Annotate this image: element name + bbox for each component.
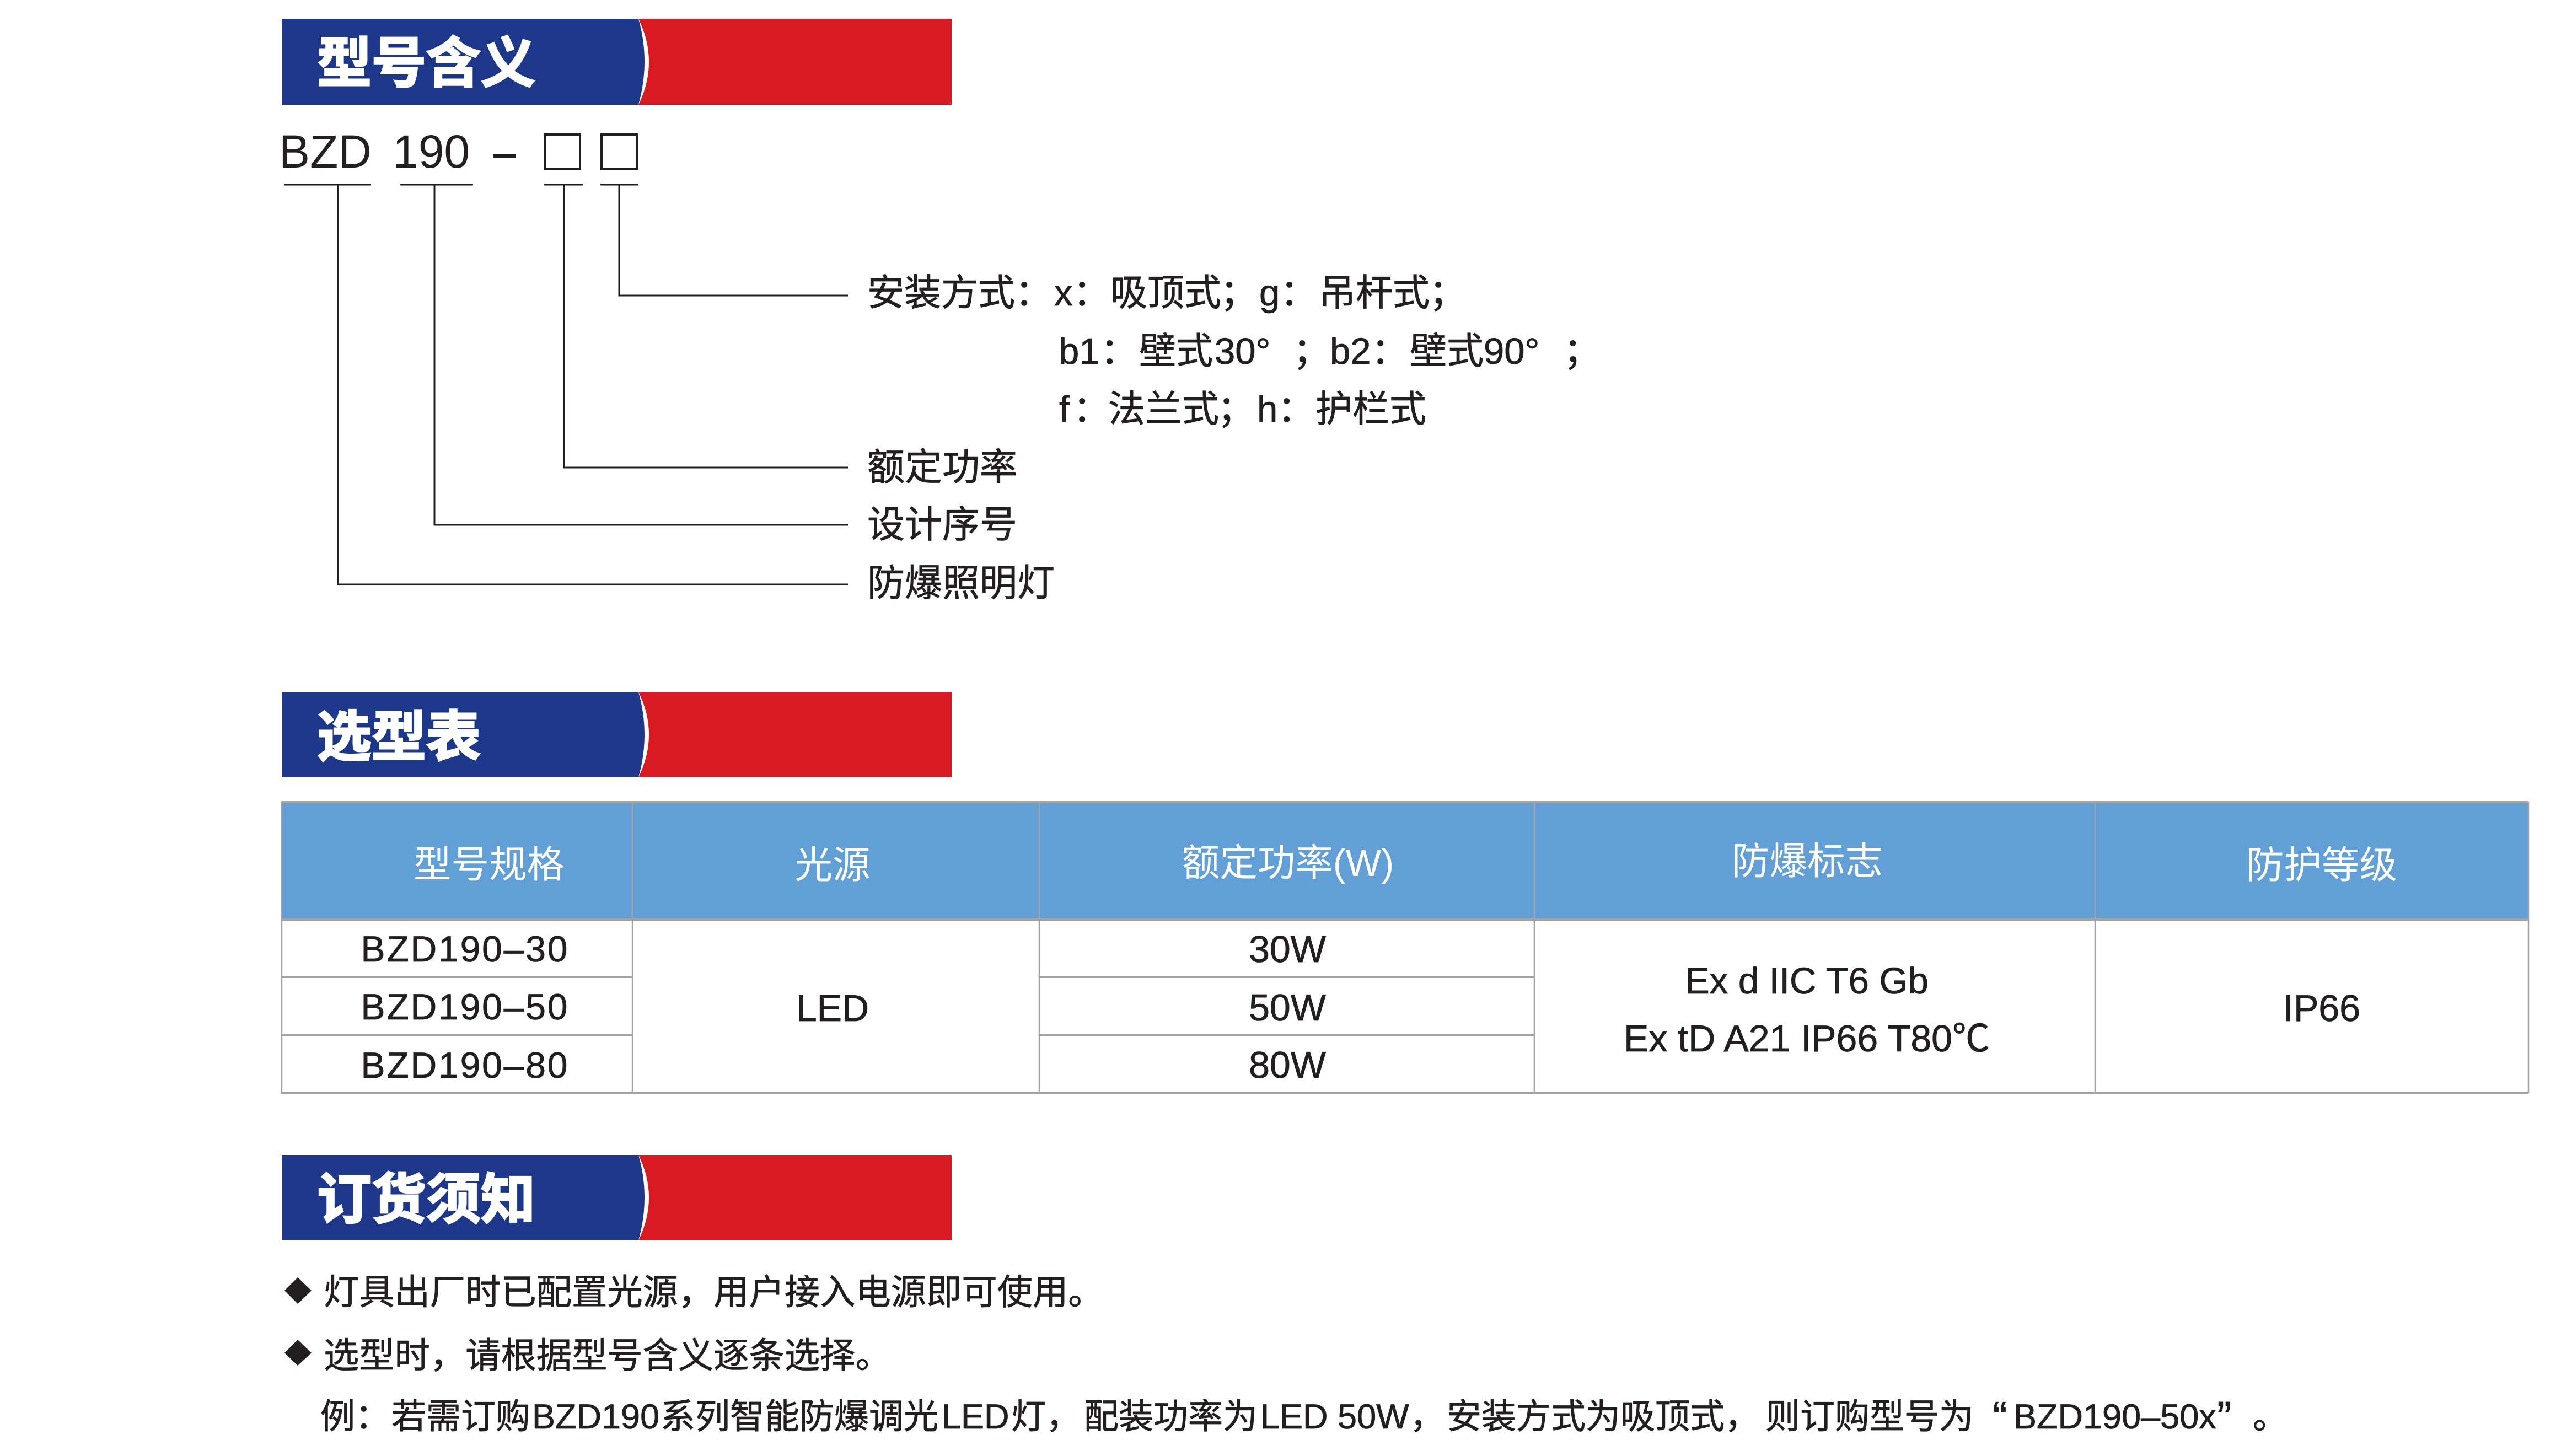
section: selection table (281, 692, 2528, 1093)
label: explosion-proof lighting: 防爆照明灯 (867, 562, 1055, 604)
label: installation method: x (1054, 272, 1073, 314)
section: ordering notes (282, 1155, 2287, 1442)
heading banner: 选型表: 选型表 (317, 706, 481, 767)
note 1: 灯具出厂时已配置光源，用户接入电源即可使用。 (324, 1272, 1104, 1312)
model code: BZD 190 - boxes: BZD (279, 126, 372, 178)
model code: BZD 190 - boxes: 190 (393, 126, 470, 178)
label: installation method: ； (1220, 272, 1257, 314)
explosion-proof mark cell: Ex tD A21 IP66 T80℃ (1624, 1018, 1990, 1060)
label: installation method: ： (1371, 331, 1408, 372)
label: installation method: 壁式 (1410, 331, 1484, 372)
label: installation method: b2 (1330, 331, 1371, 372)
rated power column: 80W (1249, 1044, 1326, 1086)
table header row (282, 802, 2528, 920)
example line: ， (1410, 1398, 1445, 1436)
example line: 则订购型号为 (1765, 1398, 1974, 1436)
example line: 若需订购 (391, 1398, 530, 1436)
label: design serial: 设计序号 (867, 504, 1017, 546)
example line: BZD190–50x (2013, 1398, 2216, 1436)
leader lines (284, 185, 848, 584)
note 2: 选型时，请根据型号含义逐条选择。 (324, 1336, 891, 1376)
label: installation method: ： (1100, 331, 1137, 372)
heading banner: 选型表 (282, 692, 952, 777)
table header row: 防爆标志 (1732, 840, 1883, 883)
example line: “ (1993, 1393, 2007, 1442)
explosion-proof mark cell (1624, 960, 1990, 1060)
model column: BZD190–50 (361, 986, 568, 1027)
label: installation method: 护栏式 (1315, 389, 1426, 430)
model column (361, 928, 568, 1086)
table header row: 型号规格 (414, 843, 565, 886)
example line: LED 50W (1260, 1398, 1409, 1436)
icon: diamond bullet (284, 1340, 312, 1366)
heading banner: 订货须知: 订货须知 (317, 1169, 535, 1230)
model column: BZD190–30 (361, 928, 568, 969)
table grid (281, 802, 2528, 1093)
table header row: 防护等级 (2246, 844, 2397, 887)
rated power column: 30W (1249, 928, 1326, 970)
heading banner: 型号含义 (282, 19, 952, 105)
label: installation method: g (1259, 272, 1280, 314)
label: installation method: 30° (1215, 331, 1270, 372)
heading banner: 型号含义: 型号含义 (317, 33, 535, 94)
label: installation method: ： (1073, 389, 1110, 430)
label: installation method: ： (1073, 272, 1110, 314)
table header row: 额定功率(W) (1182, 842, 1394, 884)
label: installation method: f (1059, 389, 1070, 430)
example line: 例： (320, 1398, 390, 1436)
example line: LED (942, 1398, 1009, 1436)
example line: 配装功率为 (1084, 1398, 1258, 1436)
example line: ” (2217, 1393, 2232, 1442)
label: installation method: ； (1429, 272, 1466, 314)
label: installation method: 法兰式 (1108, 389, 1219, 430)
model column: BZD190–80 (361, 1045, 568, 1086)
example line: 系列智能防爆调光 (661, 1398, 938, 1436)
model code: BZD 190 - boxes (279, 126, 637, 178)
example line: 。 (2253, 1398, 2287, 1436)
example line: 灯， (1011, 1398, 1081, 1436)
table header row: 光源 (794, 844, 871, 887)
rated power column (1249, 928, 1326, 1086)
table (281, 802, 2528, 1093)
explosion-proof mark cell: Ex d IIC T6 Gb (1685, 960, 1929, 1002)
protection grade cell: IP66 (2283, 987, 2360, 1029)
label: installation method: b1 (1059, 331, 1100, 372)
label: installation method: ； (1217, 389, 1254, 430)
example line: 安装方式为吸顶式， (1447, 1398, 1759, 1436)
example line: BZD190 (532, 1398, 659, 1436)
label: installation method: ： (1277, 389, 1314, 430)
label: installation method: ； (1564, 331, 1601, 372)
label: installation method (867, 272, 1601, 430)
section: model meaning (279, 19, 1601, 604)
heading banner: 订货须知 (282, 1155, 952, 1240)
label: installation method: 安装方式： (867, 272, 1052, 314)
light source cell: LED (796, 987, 869, 1029)
label: installation method: 壁式 (1139, 331, 1213, 372)
label: installation method: ； (1293, 331, 1330, 372)
icon: diamond bullet (284, 1277, 312, 1304)
label: installation method: 90° (1484, 331, 1539, 372)
label: installation method: ： (1280, 272, 1317, 314)
label: rated power: 额定功率 (867, 447, 1017, 488)
label: installation method: h (1257, 389, 1277, 430)
rated power column: 50W (1249, 987, 1326, 1029)
label: installation method: 吸顶式 (1110, 272, 1221, 314)
label: installation method: 吊杆式 (1319, 272, 1430, 314)
